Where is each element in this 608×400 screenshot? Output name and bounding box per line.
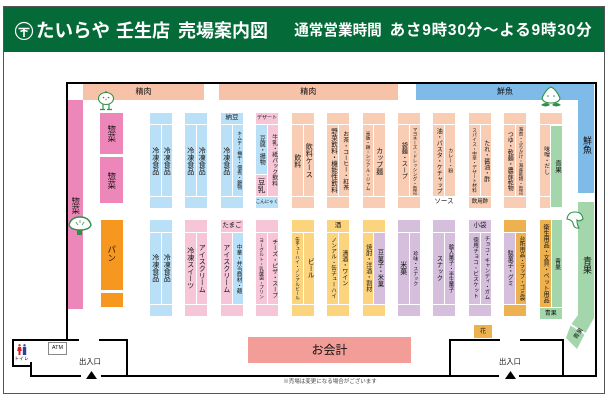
lower aisle 12 (540, 220, 562, 319)
miso and dashi (540, 125, 550, 196)
lower aisle 7 (363, 220, 385, 316)
checkout (248, 337, 411, 363)
entrance right label: 出入口 (499, 357, 521, 366)
frozen sweets: 冷凍スイーツ (187, 247, 194, 289)
dessert header: デザート (257, 115, 277, 121)
rice crackers (398, 233, 408, 304)
beer (304, 233, 314, 304)
snacks: スナック (435, 255, 442, 281)
produce (551, 126, 562, 207)
checkout: お会計 (311, 343, 348, 357)
mayonnaise and dressing (410, 125, 420, 196)
kitchen goods: 台所用品・ラップ・ゴミ袋 (518, 236, 524, 301)
drinking vinegar footer: 飲用酢 (472, 199, 488, 205)
upper aisle 8 (398, 113, 420, 208)
deli block 1 (100, 113, 123, 154)
chinese and bento ingredients (232, 233, 243, 304)
shochu (362, 233, 373, 304)
lower aisle 1 (150, 220, 172, 316)
beverage cases (304, 125, 314, 196)
seaweed (516, 125, 526, 196)
value chocolate: 徳用チョコ・ビスケット (472, 237, 478, 299)
toilet label: トイレ (14, 357, 29, 362)
small bags header (469, 220, 491, 232)
frozen food right: 冷凍食品 (198, 146, 205, 174)
milk: 牛乳・紙パック飲料 (271, 134, 277, 187)
mascot: mushroom (566, 212, 584, 229)
oil and pasta: 油・パスタ・ケチャップ (435, 128, 441, 194)
cup noodles (374, 125, 384, 196)
rice and cereal: 米飯・餅・シリアル・ジャム (366, 131, 371, 190)
oil and pasta (433, 125, 444, 196)
sauce footer: ソース (434, 198, 454, 205)
flower stand (474, 325, 492, 338)
meat counter right: 精肉 (300, 87, 316, 96)
frozen food left (150, 233, 160, 304)
sauces and vinegar (480, 125, 491, 196)
upper aisle 9 (433, 113, 455, 205)
miso and dashi: 味噌・だし (543, 146, 549, 175)
produce footer: 青果 (545, 310, 557, 316)
frozen food left: 冷凍食品 (152, 146, 159, 174)
cup noodles: カップ麺 (376, 146, 383, 174)
produce (552, 220, 562, 307)
lower aisle 2 (185, 220, 207, 316)
bakery small block (100, 293, 122, 307)
cheese and pizza: チーズ・ピザ・スープ (271, 239, 277, 298)
fish label side: 鮮魚 (582, 136, 592, 154)
curry and flour (444, 125, 455, 196)
upper aisle 1 (150, 113, 172, 208)
deli block 2 (100, 157, 123, 203)
value chocolate (469, 233, 480, 304)
produce: 青果 (554, 258, 560, 270)
chuhai: 缶チューハイ・ノンアルビール (296, 237, 300, 300)
small bags header: 小袋 (474, 222, 486, 229)
sauces and vinegar: たれ・醤油・酢 (483, 140, 489, 182)
beverages: 飲料 (294, 154, 301, 168)
header band (4, 7, 604, 52)
yogurt (256, 233, 266, 304)
ATM box: ATM (52, 345, 63, 351)
lower aisle 8 (398, 220, 420, 316)
meat counter right (218, 84, 398, 100)
konnyaku footer: こんにゃく (256, 199, 278, 204)
opening hours: あさ9時30分～よる9時30分 (390, 22, 592, 39)
upper aisle 3 (221, 113, 243, 208)
lower aisle 5 (292, 220, 314, 316)
lower aisle 3 (221, 220, 243, 316)
flower stand: 花 (480, 328, 486, 334)
bakery block: パン (107, 245, 117, 262)
upper aisle 5 (292, 113, 314, 208)
cheap sweets: 駄菓子・グミ (506, 250, 512, 286)
frozen food right (162, 125, 172, 196)
upper aisle 11 (504, 113, 526, 208)
ATM box (48, 342, 67, 355)
kimchi and pickles: キムチ・梅干・佃煮・錦物 (236, 131, 241, 190)
eggs header (221, 220, 243, 232)
noodles and soup: 袋麺・スープ (400, 142, 407, 179)
frozen food: 冷凍食品 (223, 146, 230, 174)
lower aisle 4 (256, 220, 278, 316)
upper aisle 2 (185, 113, 207, 208)
vegetable drinks (327, 125, 338, 196)
alcohol header (327, 220, 349, 232)
spices (469, 125, 480, 196)
store branch name: 壬生店 (116, 21, 170, 41)
chinese and bento ingredients: 中華・弁当商材・麺 (236, 244, 242, 293)
kitchen goods (516, 233, 526, 304)
store brand name: たいらや (36, 20, 110, 41)
bean snacks: 豆菓子・米菓 (376, 249, 383, 287)
yogurt: ヨーグルト・乳酸菌・プリン (260, 238, 265, 299)
lower aisle 6 (327, 220, 349, 316)
tea and coffee: お茶・コーヒー・紅茶 (342, 131, 348, 190)
frozen food left (185, 125, 196, 196)
upper aisle 6 (327, 113, 349, 208)
footnote: ※売場は変更になる場合がございます (283, 379, 377, 385)
seaweed: 海苔・ふりかけ・海産乾物・缶詰 (519, 127, 524, 194)
deli block 2: 惣菜 (107, 172, 117, 188)
fish counter (416, 84, 594, 193)
upper aisle 4 (256, 113, 278, 208)
ice cream: アイスクリーム (198, 244, 205, 293)
curry and flour: カレー・粉 (447, 148, 453, 173)
toilet icon (17, 344, 26, 355)
frozen food left: 冷凍食品 (187, 146, 194, 174)
ice cream (221, 233, 232, 304)
tofu (256, 125, 266, 174)
entrance right arrow (505, 371, 516, 379)
frozen food (221, 125, 232, 196)
deli wall (68, 100, 83, 309)
icon: store logo (14, 22, 34, 40)
kimchi and pickles (232, 125, 243, 196)
bakery block (100, 220, 122, 290)
dessert header (256, 113, 278, 124)
eggs header: たまご (222, 222, 242, 229)
upper aisle 12 (540, 113, 562, 208)
cheese and pizza (268, 233, 278, 304)
imported sweets: 輸入菓子・半生菓子 (447, 244, 453, 293)
frozen sweets (185, 233, 196, 304)
rice and cereal (362, 125, 373, 196)
entrance left label: 出入口 (79, 357, 101, 366)
soy milk (256, 175, 266, 196)
lower aisle 9 (433, 220, 455, 316)
natto header: 納豆 (226, 114, 238, 121)
entrance left arrow (86, 371, 97, 379)
tofu: 豆腐・揚物 (258, 134, 264, 164)
sake and wine: 清酒・ワイン (341, 250, 347, 286)
fish label top: 鮮魚 (497, 87, 513, 96)
shochu: 焼酎・洋酒・割材 (365, 244, 371, 292)
delicacies and snacks: 珍味・スナック (412, 251, 418, 286)
konnyaku footer (256, 197, 278, 208)
tea and coffee (338, 125, 349, 196)
soy milk: 豆乳 (257, 178, 266, 193)
ice cream (196, 233, 207, 304)
opening hours label: 通常営業時間 (294, 23, 382, 39)
frozen food right: 冷凍食品 (163, 146, 170, 174)
produce footer (540, 308, 562, 319)
produce label side: 青果 (582, 256, 592, 274)
rice crackers: 米菓 (400, 261, 407, 275)
frozen food left (150, 125, 160, 196)
lower aisle 10 (469, 220, 491, 316)
natto header (221, 113, 243, 124)
noodles and soup (398, 125, 408, 196)
beverages (292, 125, 302, 196)
lower aisle 11 (504, 220, 526, 316)
deli wall label: 惣菜 (71, 196, 81, 214)
snacks (433, 233, 444, 304)
non alcoholic: ノンアル・缶チューハイ (330, 237, 336, 299)
bean snacks (374, 233, 384, 304)
meat counter left: 精肉 (136, 87, 152, 96)
hygiene and stationery: 衛生用品・文具・ペット用品 (542, 224, 549, 303)
soup base and dried noodles: つゆ・乾麺・農産乾物 (506, 130, 512, 190)
non alcoholic (327, 233, 338, 304)
soup base and dried noodles (504, 125, 514, 196)
deli block 1: 惣菜 (107, 125, 117, 142)
title: 売場案内図 (178, 21, 268, 41)
meat counter left (83, 84, 204, 100)
spices: スパイス・中華・デザート材料 (473, 128, 478, 193)
mascot: cabbage (68, 216, 92, 235)
alcohol header: 酒 (335, 222, 341, 229)
delicacies and snacks (410, 233, 420, 304)
frozen food right (196, 125, 207, 196)
imported sweets (444, 233, 455, 304)
sake and wine (338, 233, 349, 304)
frozen food left: 冷凍食品 (152, 254, 159, 282)
vegetable drinks: 野菜飲料・機能性飲料 (330, 128, 336, 193)
ice cream: アイスクリーム (223, 244, 230, 293)
frozen food right: 冷凍食品 (163, 254, 170, 282)
beer: ビール (306, 258, 313, 278)
upper aisle 7 (363, 113, 385, 208)
mascot: rice ball (541, 86, 561, 106)
drinking vinegar footer (469, 197, 491, 208)
frozen food right (162, 233, 172, 304)
beverage cases: 飲料ケース (305, 143, 312, 178)
chocolate and candy (480, 233, 491, 304)
mayonnaise and dressing: マヨネーズ・ドレッシング・缶詰 (413, 127, 418, 194)
milk (268, 125, 278, 196)
upper aisle 10 (469, 113, 491, 208)
produce wall (566, 202, 594, 349)
produce label diagonal: 青果 (573, 327, 585, 341)
chocolate and candy: チョコ・キャンディ・ガム (483, 236, 489, 300)
chuhai (292, 233, 302, 304)
cheap sweets (504, 233, 514, 304)
produce: 青果 (554, 160, 560, 173)
mascot: chicken (98, 91, 114, 110)
hygiene and stationery (540, 220, 550, 307)
